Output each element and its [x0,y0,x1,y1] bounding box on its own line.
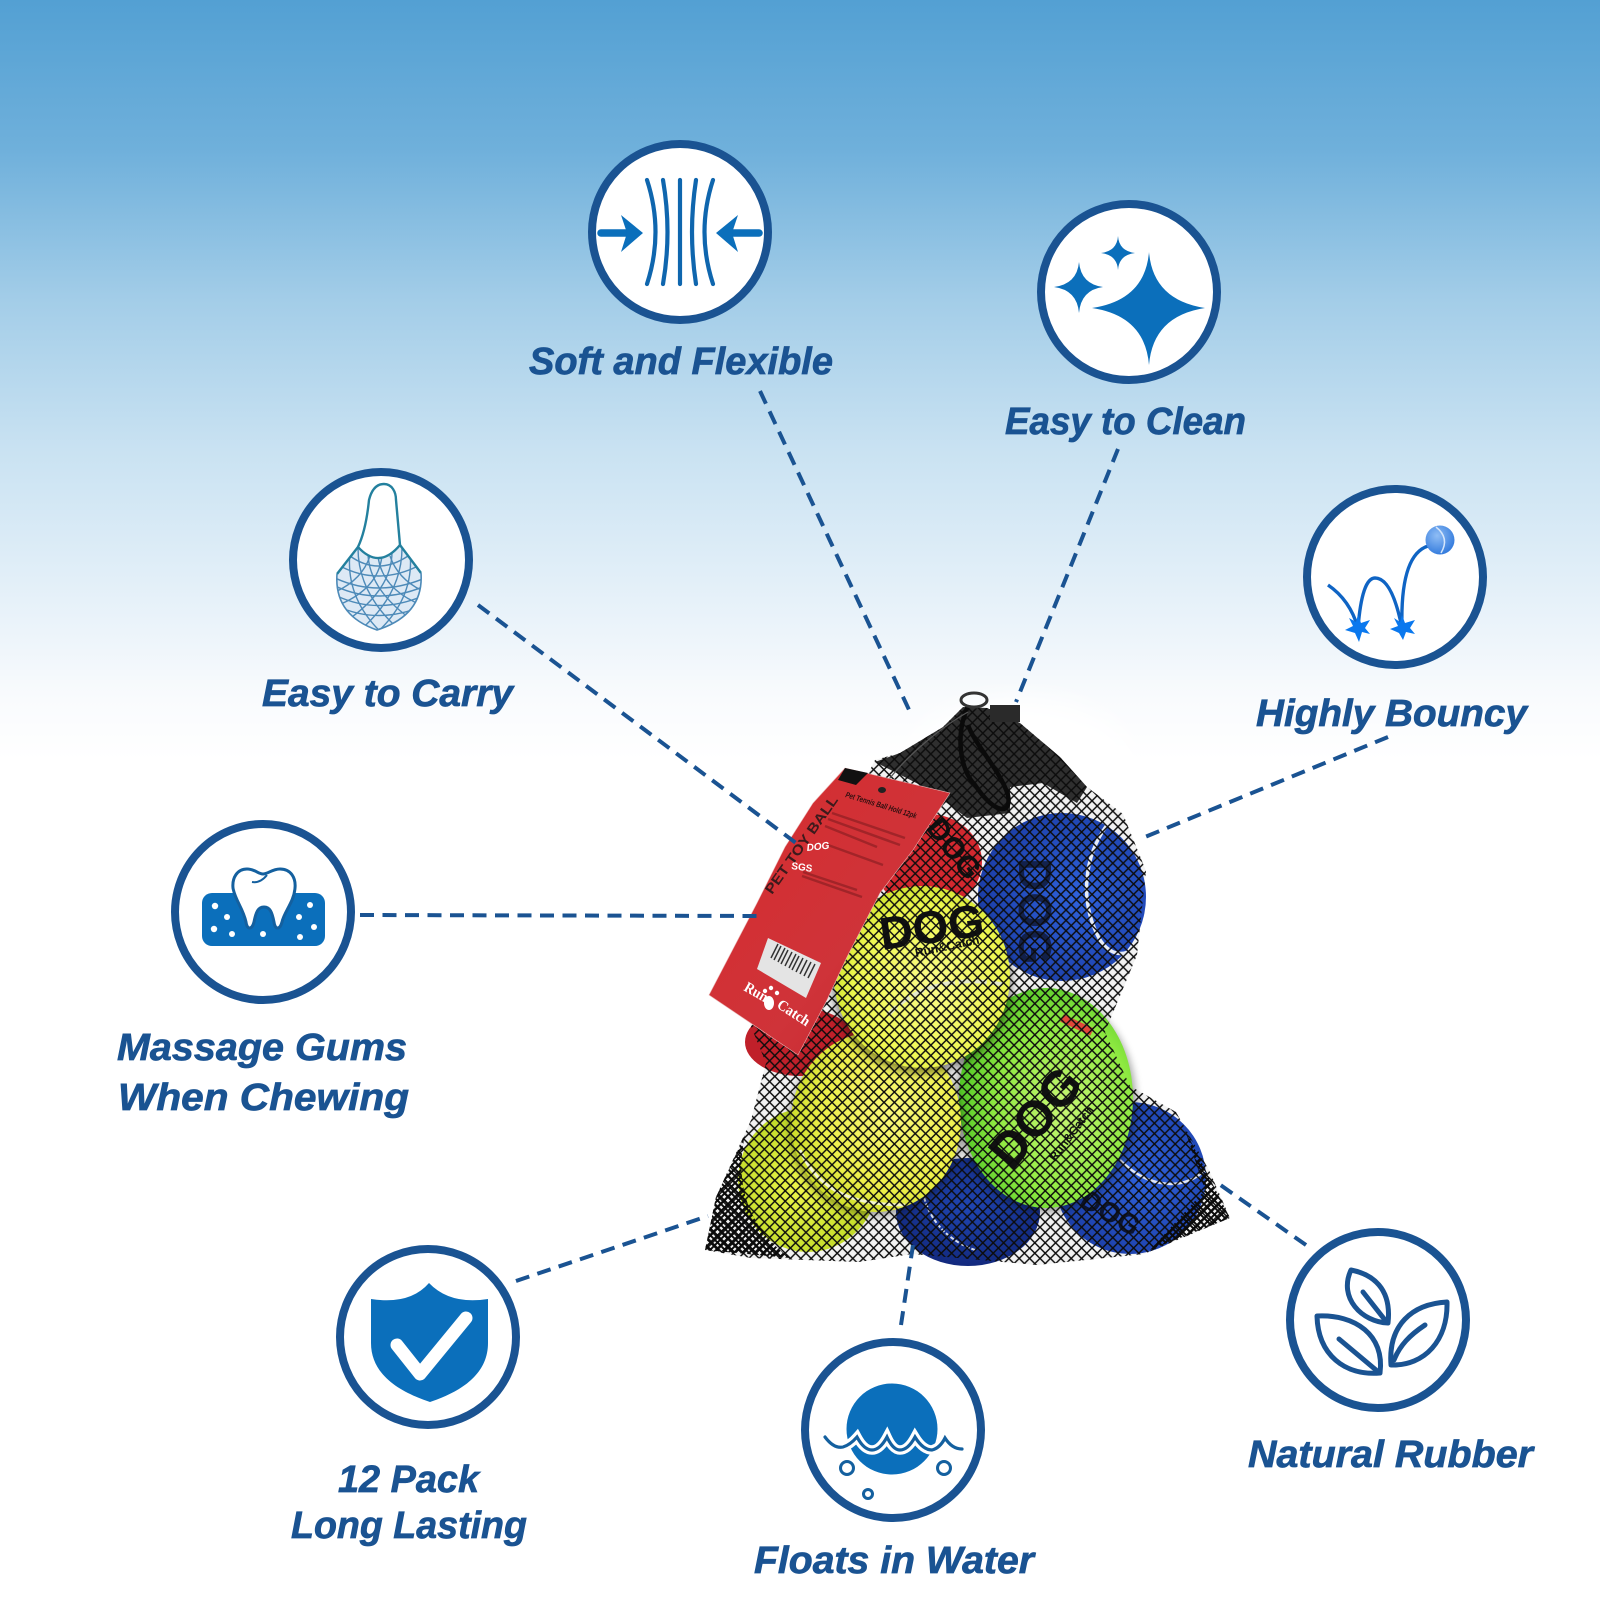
label: Highly Bouncy [1256,693,1529,735]
badge ring [592,144,768,320]
badge ring [1041,204,1217,380]
label: two lines: When Chewing [118,1077,409,1119]
icon: tooth and gums [202,869,325,946]
blue ball bottom right [1054,1102,1206,1254]
tag corner logo [838,768,868,785]
dashed connector: highly bouncy [1145,737,1388,837]
tag description lines [802,813,905,897]
icon: floating ball [825,1384,962,1498]
feature: natural rubber [1248,1232,1535,1476]
label: two lines [117,1027,409,1119]
lime ball bottom left [738,1108,878,1252]
dashed connector: easy to clean [1016,449,1118,702]
tag vertical title: PET TOY BALL [761,792,841,897]
icon: sparkles [1054,236,1205,365]
cord stopper [990,705,1020,722]
drawstring cord [961,706,1009,809]
dark gathered net at the top [875,707,1087,818]
feature: massage gums [117,824,409,1119]
feature: soft and flexible [529,144,833,383]
red ball upper [874,812,988,910]
yellow ball top [834,886,1010,1068]
yellow ball top: DOG [876,894,987,960]
label: Natural Rubber [1248,1434,1535,1476]
icon: string bag [335,484,425,636]
dashed connector: massage gums [360,915,763,916]
icon: leaves [1317,1270,1447,1373]
dashed connector: 12 pack [516,1216,708,1281]
icon: shield with check [371,1283,488,1402]
hang tag: SGS [791,861,813,875]
label: two lines: 12 Pack [338,1459,481,1501]
label: Easy to Carry [262,673,515,715]
badge ring [805,1342,981,1518]
product photo: mesh bag of balls [700,690,1235,1270]
label: Easy to Clean [1005,401,1246,443]
white halo [900,700,1140,860]
mesh sack backing [705,707,1230,1265]
feature: easy to carry [262,472,515,715]
icon: bouncing ball [1328,526,1454,642]
Catch brand text: Catch [774,997,813,1030]
label: two lines: Massage Gums [117,1027,407,1069]
blue ball bottom right: DOG [1075,1183,1146,1242]
red ball upper: DOG [919,812,988,886]
shadow beneath top yellow ball [832,892,1012,1074]
tag eyelet [878,787,886,793]
badge ring [293,472,469,648]
label: Floats in Water [754,1540,1036,1582]
paw print [763,986,779,1010]
icon: compressed lines with arrows [601,180,759,284]
cord knot [961,693,987,707]
feature: easy to clean [1005,204,1246,443]
badge ring [175,824,351,1000]
dashed connector: floats in water [901,1245,913,1325]
dashed connector: easy to carry [478,605,796,843]
badge ring [340,1249,516,1425]
green ball [959,988,1133,1208]
Run brand text: Run [741,980,771,1006]
shadow beneath lower yellow ball [789,1036,963,1216]
dashed connector: natural rubber [1219,1184,1306,1245]
green ball: Run&Catch [1046,1103,1097,1164]
dashed connector: soft and flexible [760,391,911,714]
background gradient [0,0,1600,760]
feature: floats in water [754,1342,1036,1582]
label: two lines: Long Lasting [291,1505,527,1547]
barcode label [757,938,821,998]
tag logos: DOG [806,841,830,854]
green ball: DOG [978,1056,1094,1179]
label: two lines [291,1459,527,1547]
badge ring [1290,1232,1466,1408]
navy ball bottom centre [896,1158,1040,1266]
tag product name: Pet Tennis Ball Hold 12pk [844,790,918,821]
feature: 12 pack long lasting [291,1249,527,1547]
blue ball top right [978,813,1146,981]
hang tag [709,768,950,1055]
yellow ball top: Run&Catch [914,933,981,960]
blue ball top right: DOG [1009,858,1061,966]
dense net bottom right [1150,1130,1230,1250]
label: Soft and Flexible [529,341,833,383]
shadow beneath green ball [956,992,1136,1212]
yellow ball lower [791,1032,961,1212]
net overlay [700,690,1235,1270]
dense net bottom left [705,1135,790,1258]
feature: highly bouncy [1256,489,1529,735]
red ball lower [745,1008,855,1076]
badge ring [1307,489,1483,665]
tag wire [881,712,968,790]
